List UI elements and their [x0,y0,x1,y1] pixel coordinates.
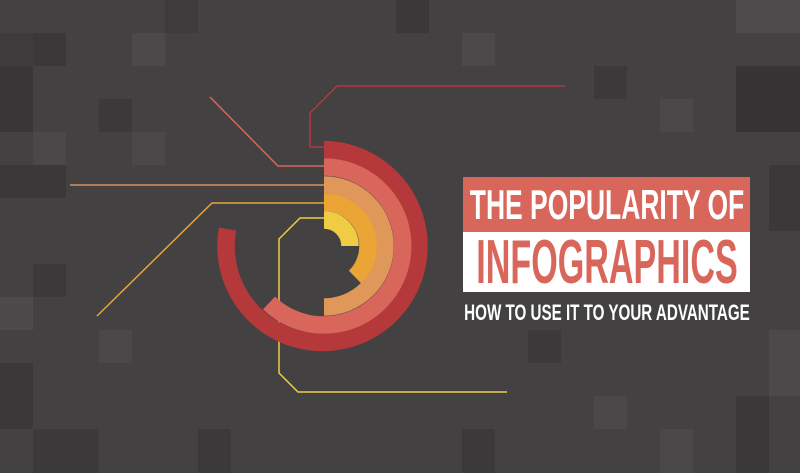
title line 1: THE POPULARITY OF [469,181,744,228]
subtitle: HOW TO USE IT TO YOUR ADVANTAGE [464,300,749,325]
title block [463,177,750,325]
connector lines [70,86,565,392]
title line 2: INFOGRAPHICS [476,228,737,297]
arcs [226,150,419,342]
